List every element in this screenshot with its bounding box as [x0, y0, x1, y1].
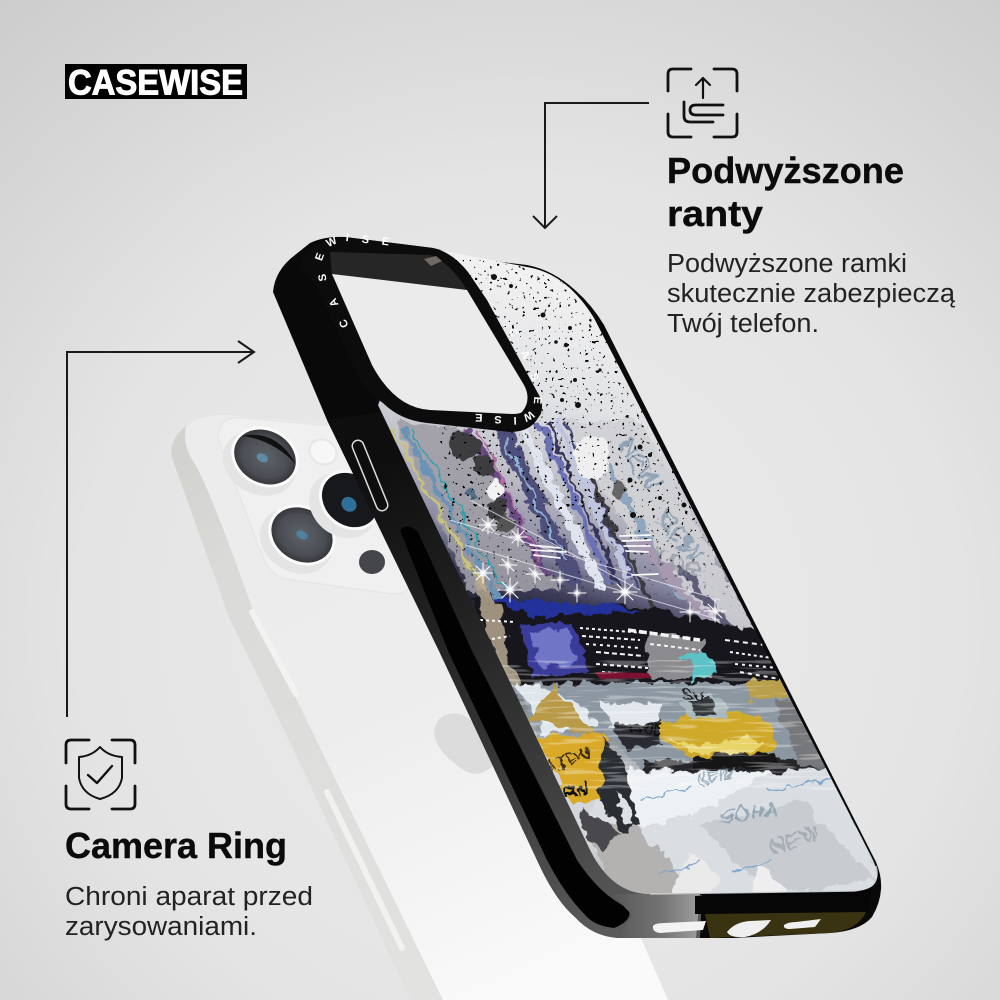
ring lettering: E [381, 236, 390, 248]
teal building patch [682, 650, 716, 680]
pale blotch [574, 436, 610, 480]
ring lettering: W [324, 234, 340, 250]
printed artwork: New York street [370, 240, 900, 900]
heading: Podwyższone ranty: ranty [667, 193, 763, 234]
speaker opening right [784, 919, 821, 929]
ghost lettering: NEW [613, 434, 666, 496]
ghost lettering: YOR [647, 541, 706, 587]
arrow to raised edges [533, 103, 649, 228]
taxi right: SU [682, 685, 707, 706]
taxi left: ATEW [545, 745, 592, 776]
side slot [400, 526, 629, 928]
text: camera ring description [65, 883, 313, 941]
snowy foreground [590, 765, 884, 900]
glint on wall [424, 256, 442, 266]
ink splats [491, 274, 686, 518]
street blur [512, 683, 830, 770]
dark paint blobs [449, 430, 628, 534]
text: raised edges description: Podwyższone ramki [667, 250, 907, 278]
ring lettering: A [518, 348, 532, 361]
colour streaks [392, 424, 740, 640]
artwork base tones [370, 240, 900, 900]
ring lettering: E [531, 396, 543, 404]
heading: Podwyższone ranty: Podwyższone [667, 150, 904, 191]
speaker opening left [653, 921, 706, 933]
dark building band [470, 596, 780, 688]
camera plateau [218, 418, 412, 594]
lens top left [211, 413, 310, 508]
black protective case [273, 232, 900, 938]
ring lettering: E [475, 411, 483, 423]
text: camera ring description: zarysowaniami. [65, 913, 257, 941]
phone side band [171, 426, 443, 1000]
lidar sensor [359, 550, 385, 574]
pale upper right wash [560, 420, 760, 640]
heading: Podwyższone ranty [667, 150, 904, 234]
ring lettering: I [513, 414, 517, 426]
volume button inner [358, 446, 382, 505]
ring lettering: A [327, 296, 341, 309]
ring lettering: S [527, 371, 541, 382]
ring lettering: C [506, 326, 520, 339]
usb port opening [727, 920, 771, 937]
snow lettering: SOHA [719, 798, 780, 830]
camera opening [332, 274, 528, 414]
phone body [171, 415, 668, 1000]
inner wall of opening [330, 252, 467, 290]
ring lettering: S [494, 413, 502, 425]
taxi right: OUC [630, 722, 664, 739]
taxi left: FAN [551, 777, 591, 806]
ring lettering [313, 232, 543, 426]
motion blur streaks [500, 660, 840, 790]
ring lettering: C [337, 317, 351, 330]
apple logo imprint [434, 713, 494, 774]
arrow to camera ring [67, 341, 254, 717]
red window accents [595, 672, 652, 679]
snow lettering: NEW [697, 765, 736, 789]
heading: Camera Ring: Camera Ring [65, 825, 287, 866]
snow lettering [698, 767, 818, 854]
sparkles [473, 516, 726, 622]
lens bottom [248, 490, 348, 587]
text: camera ring description: Chroni aparat przed [65, 883, 313, 911]
flash [305, 435, 341, 469]
case shell [273, 237, 881, 938]
text: raised edges description: skutecznie zabezpieczą [667, 280, 956, 308]
text: raised edges description [667, 250, 956, 338]
beige paint left [473, 574, 522, 686]
lit windows [480, 620, 785, 680]
olive port strip [705, 912, 866, 938]
text: raised edges description: Twój telefon. [667, 310, 819, 338]
ring lettering: I [345, 232, 349, 244]
striped white highlights [530, 535, 658, 575]
blue brush marks [640, 780, 830, 875]
taxi right [630, 680, 792, 769]
volume button outline [358, 446, 382, 505]
sparkle glows [480, 522, 718, 615]
ring lettering: S [316, 273, 330, 282]
painted layers [392, 420, 884, 900]
purple block [517, 623, 590, 680]
grey building block [647, 633, 712, 680]
ring lettering: S [361, 234, 370, 246]
ghost lettering: BEW [650, 507, 707, 567]
ring outer [300, 237, 542, 432]
logo: CASEWISE: CASEWISE [68, 64, 243, 102]
lens right [296, 454, 394, 552]
camera ring [300, 232, 543, 432]
bottom right black edge [695, 888, 872, 914]
case left translucent edge [327, 412, 702, 938]
icon: shield with check [66, 740, 135, 809]
bottom translucent edge [612, 894, 700, 938]
ring lettering: W [520, 408, 536, 424]
screen rim highlight [650, 866, 877, 894]
ring lettering: E [313, 251, 327, 262]
white phone rear view [171, 413, 668, 1000]
ghost lettering [618, 436, 705, 577]
blue sheen [490, 598, 640, 616]
icon: raised edges [668, 69, 737, 137]
side button upper [252, 612, 296, 694]
snow lettering: NEW [766, 820, 823, 860]
white glare band [450, 500, 720, 620]
side button lower [327, 792, 402, 948]
taxi left [530, 683, 640, 850]
grey left panel [395, 420, 560, 590]
ink speckles [440, 260, 746, 614]
